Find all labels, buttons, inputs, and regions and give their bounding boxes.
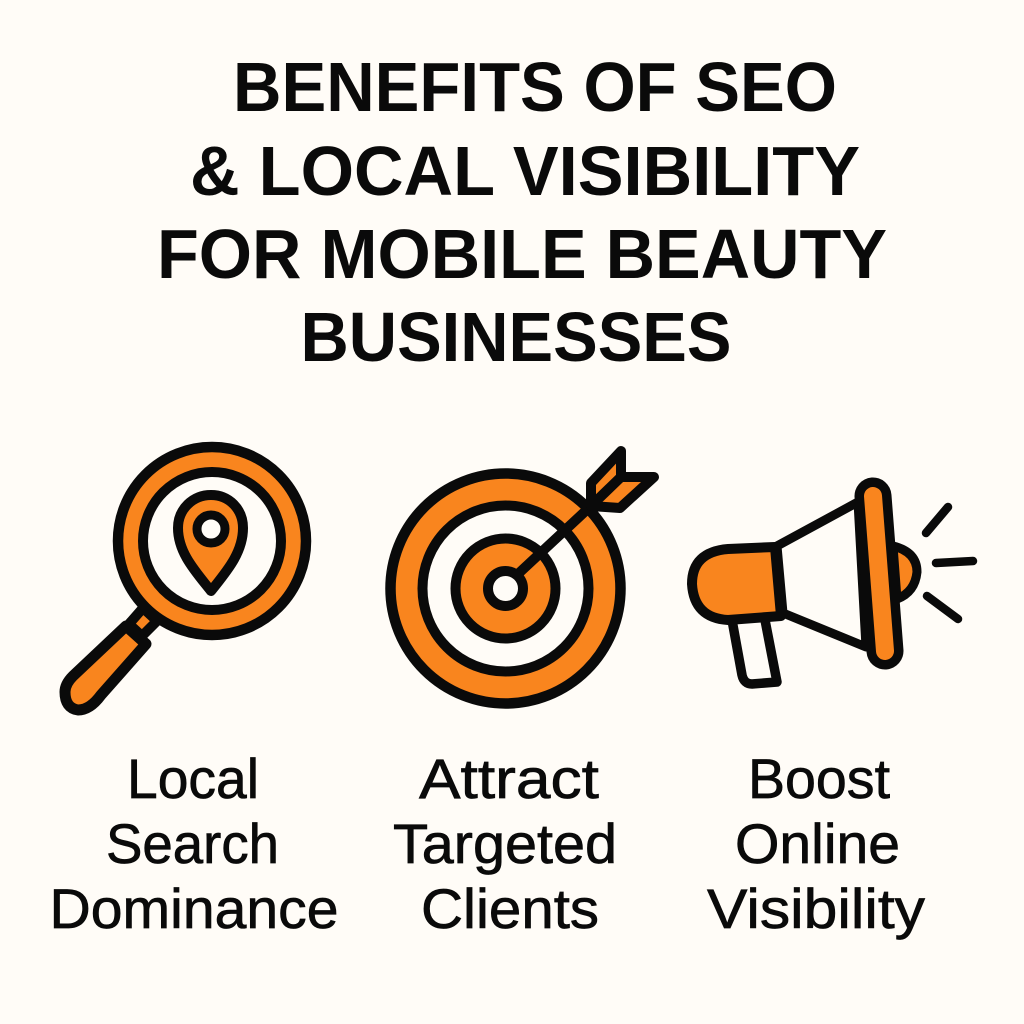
label: boost online visibility — [707, 747, 925, 940]
label: local search dominance: Dominance — [50, 877, 338, 940]
title: & LOCAL VISIBILITY — [190, 132, 860, 210]
icon: megaphone — [692, 496, 973, 684]
label: attract targeted clients: Targeted — [393, 812, 617, 875]
label: boost online visibility: Online — [735, 812, 900, 875]
label: local search dominance — [50, 747, 338, 940]
label: boost online visibility: Visibility — [707, 877, 925, 940]
label: attract targeted clients: Clients — [421, 877, 599, 940]
label: attract targeted clients — [393, 747, 617, 940]
icon: target with arrow — [390, 451, 654, 704]
label: attract targeted clients: Attract — [419, 747, 599, 810]
title: BENEFITS OF SEO — [233, 48, 837, 126]
label: boost online visibility: Boost — [748, 747, 890, 810]
title: FOR MOBILE BEAUTY — [157, 215, 887, 293]
title — [157, 48, 887, 376]
icon: magnifying glass with location pin — [65, 447, 306, 710]
title: BUSINESSES — [300, 298, 732, 376]
label: local search dominance: Local — [127, 747, 259, 810]
label: local search dominance: Search — [106, 812, 279, 875]
